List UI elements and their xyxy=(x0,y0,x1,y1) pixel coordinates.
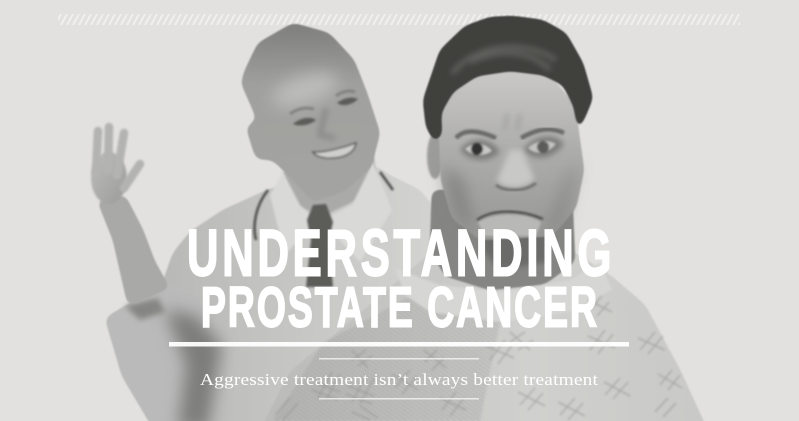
doctor coat and torso xyxy=(150,165,448,421)
gown print marks xyxy=(275,296,682,420)
title line 1: UNDERSTANDING xyxy=(187,215,611,290)
doctor collar xyxy=(270,162,392,262)
title xyxy=(187,215,611,339)
doctor palm xyxy=(91,152,127,204)
patient gown xyxy=(255,240,712,421)
neck shadow xyxy=(482,224,550,270)
patient eyes xyxy=(465,141,556,155)
patient nose xyxy=(497,150,534,187)
hair highlights xyxy=(452,47,556,74)
doctor forearm xyxy=(97,195,170,306)
patient face xyxy=(438,70,584,240)
gown stripes xyxy=(273,287,500,421)
left eye xyxy=(465,144,492,155)
doctor arm shadow xyxy=(165,310,222,421)
stethoscope xyxy=(254,172,393,240)
patient hair xyxy=(423,16,593,143)
patient ear xyxy=(427,133,443,179)
doctor forehead highlight xyxy=(268,66,342,114)
tagline bottom rule xyxy=(319,398,479,400)
doctor neck xyxy=(283,150,378,215)
tagline: Aggressive treatment isn’t always better treatment xyxy=(200,370,598,389)
cheek shading xyxy=(442,160,578,236)
doctor brows xyxy=(290,91,355,114)
photo: patient xyxy=(255,16,712,421)
nostril shadow xyxy=(496,183,536,190)
photo: doctor xyxy=(91,23,448,421)
title line 2: PROSTATE CANCER xyxy=(201,277,597,339)
doctor mouth xyxy=(313,143,356,158)
doctor head xyxy=(241,23,380,202)
patient brows xyxy=(456,129,564,138)
right iris xyxy=(537,141,549,153)
title rule xyxy=(169,342,629,346)
doctor tie xyxy=(306,204,333,287)
patient frown xyxy=(477,212,543,220)
right eye xyxy=(528,141,556,153)
doctor sleeve xyxy=(105,282,212,421)
tagline top rule xyxy=(319,358,479,360)
patient eye sockets xyxy=(460,136,564,160)
brow furrow xyxy=(505,114,520,130)
doctor eyes xyxy=(293,98,358,125)
cuff fold xyxy=(125,298,165,320)
hatched top strip xyxy=(58,14,740,25)
patient lower lip xyxy=(478,214,541,236)
left iris xyxy=(471,143,483,155)
gown collar xyxy=(395,262,612,322)
doctor fingers xyxy=(96,127,140,188)
doctor nose xyxy=(320,108,335,138)
patient neck xyxy=(430,190,575,290)
